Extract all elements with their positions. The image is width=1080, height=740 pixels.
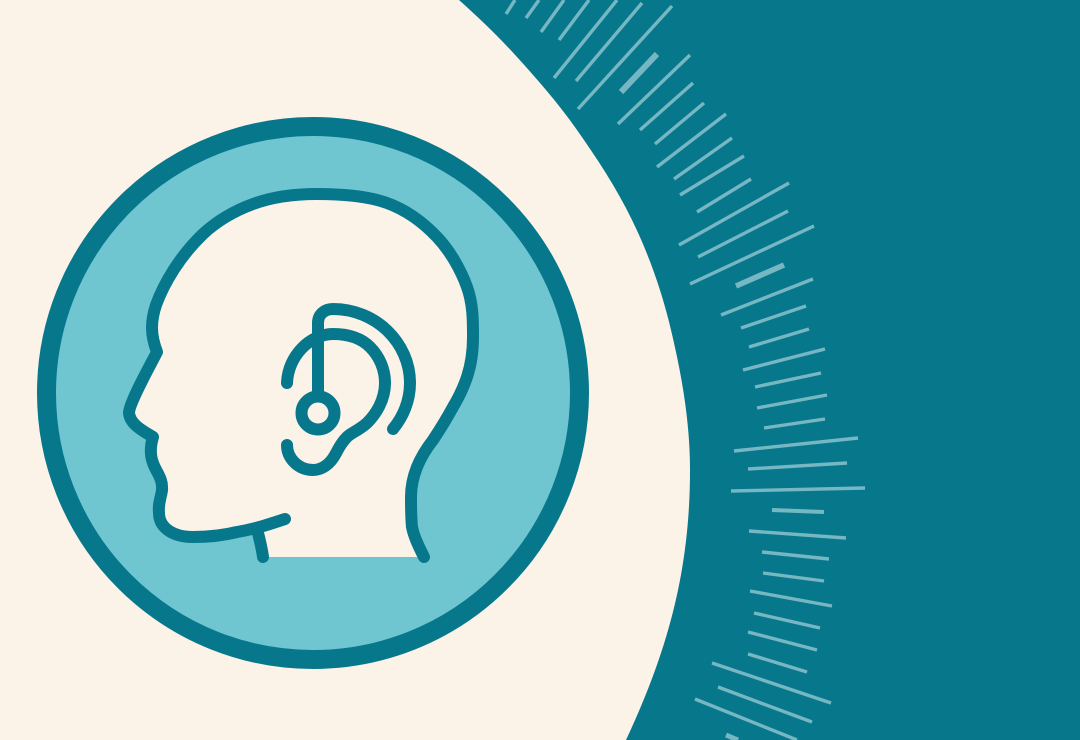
icon badge: head with hearing aid (46, 126, 580, 660)
head silhouette fill (129, 194, 473, 557)
badge circle (46, 126, 580, 660)
cream arc panel (0, 0, 690, 740)
hearing aid stem and hook (318, 309, 410, 429)
head outline (129, 194, 473, 557)
ear outline (287, 334, 385, 470)
sound wave ticks (506, 0, 865, 740)
hearing aid ear piece (302, 396, 334, 430)
